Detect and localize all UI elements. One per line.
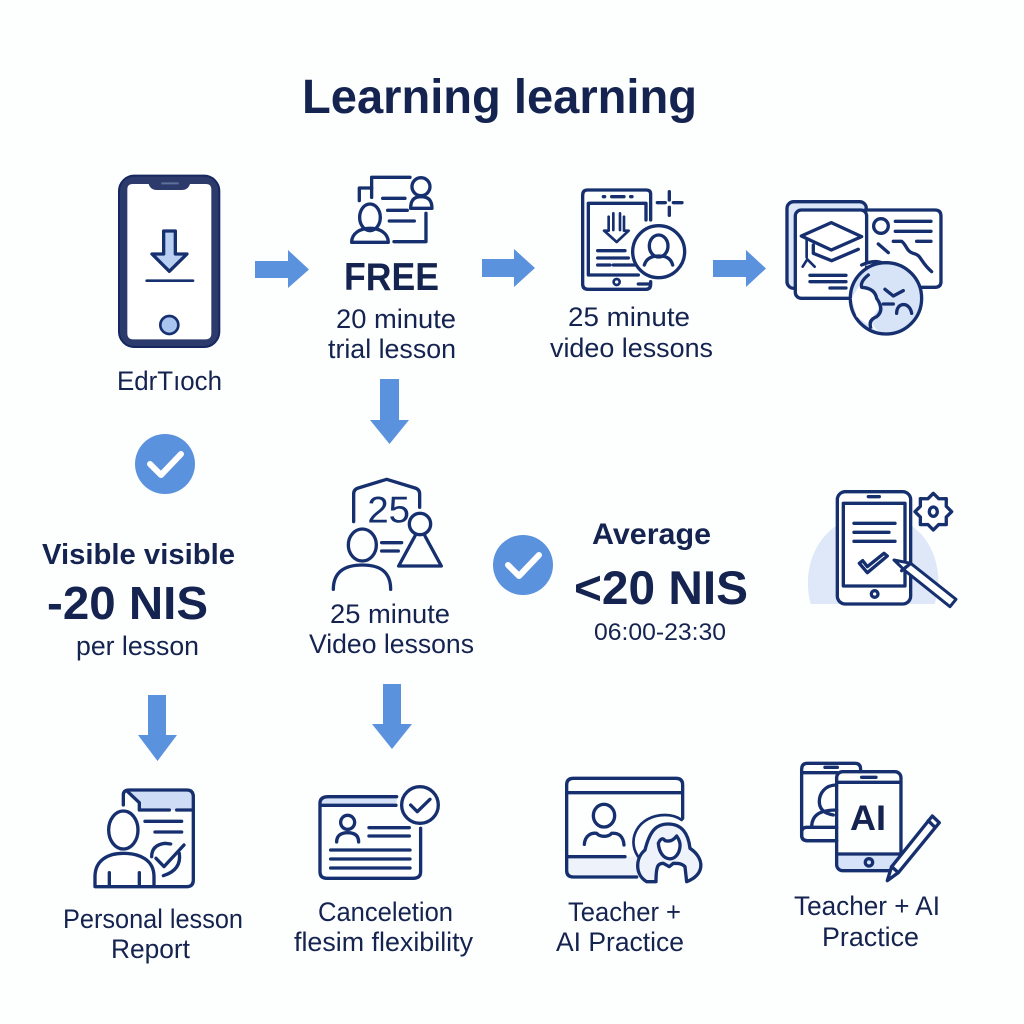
label: 25 minute middle: 25 minute (330, 599, 450, 629)
icon: AI tablets and pencil: AI (850, 799, 886, 838)
label: video lessons: video lessons (550, 333, 713, 363)
label: Canceletion: Canceletion (318, 897, 453, 927)
check badge: centre (493, 535, 553, 595)
label: Report: Report (111, 934, 191, 964)
arrow: phone to trial (255, 250, 309, 288)
label: hours: 06:00-23:30 (594, 619, 726, 646)
arrow: price down to report (138, 695, 177, 761)
label: <20 NIS: <20 NIS (574, 561, 748, 614)
label: flesim flexibility: flesim flexibility (294, 927, 474, 957)
title: Learning learning (302, 71, 697, 124)
label: trial lesson: trial lesson (328, 334, 456, 364)
label: Video lessons: Video lessons (309, 629, 474, 659)
label: Average: Average (592, 518, 711, 551)
icon: tablet with gear and pencil (808, 492, 956, 607)
arrow: video to graduation (713, 250, 766, 287)
icon: 25 minute teacher and student (333, 479, 441, 589)
label: Teacher +: Teacher + (568, 897, 681, 927)
label: per lesson: per lesson (76, 631, 199, 661)
label: Practice: Practice (822, 922, 919, 952)
check badge: left (135, 434, 195, 494)
arrow: trial to video (482, 249, 535, 287)
label: EdrTıoch: EdrTıoch (117, 366, 222, 396)
label: Visible visible: Visible visible (42, 539, 235, 571)
icon: personal report (95, 790, 193, 887)
icon: tablet video lesson (583, 190, 685, 289)
label: 25 minute: 25 minute (568, 302, 690, 332)
arrow: middle down to cancellation (372, 684, 412, 749)
label: -20 NIS: -20 NIS (47, 577, 208, 629)
icon: teacher video window (567, 778, 701, 882)
icon: AI tablets and pencil (802, 763, 939, 881)
arrow: trial down to 25 minute (370, 379, 409, 444)
icon: 25 minute teacher and student: 25 (367, 489, 410, 531)
icon: cancellation card (320, 787, 438, 878)
label: AI Practice: AI Practice (556, 927, 684, 957)
label: 20 minute: 20 minute (336, 304, 456, 334)
label: FREE: FREE (344, 256, 439, 299)
label: Personal lesson: Personal lesson (63, 904, 243, 934)
icon: phone download (119, 176, 219, 347)
icon: graduation and globe (787, 202, 941, 334)
icon: trial lesson people (352, 177, 432, 242)
label: Teacher + AI: Teacher + AI (794, 891, 940, 921)
